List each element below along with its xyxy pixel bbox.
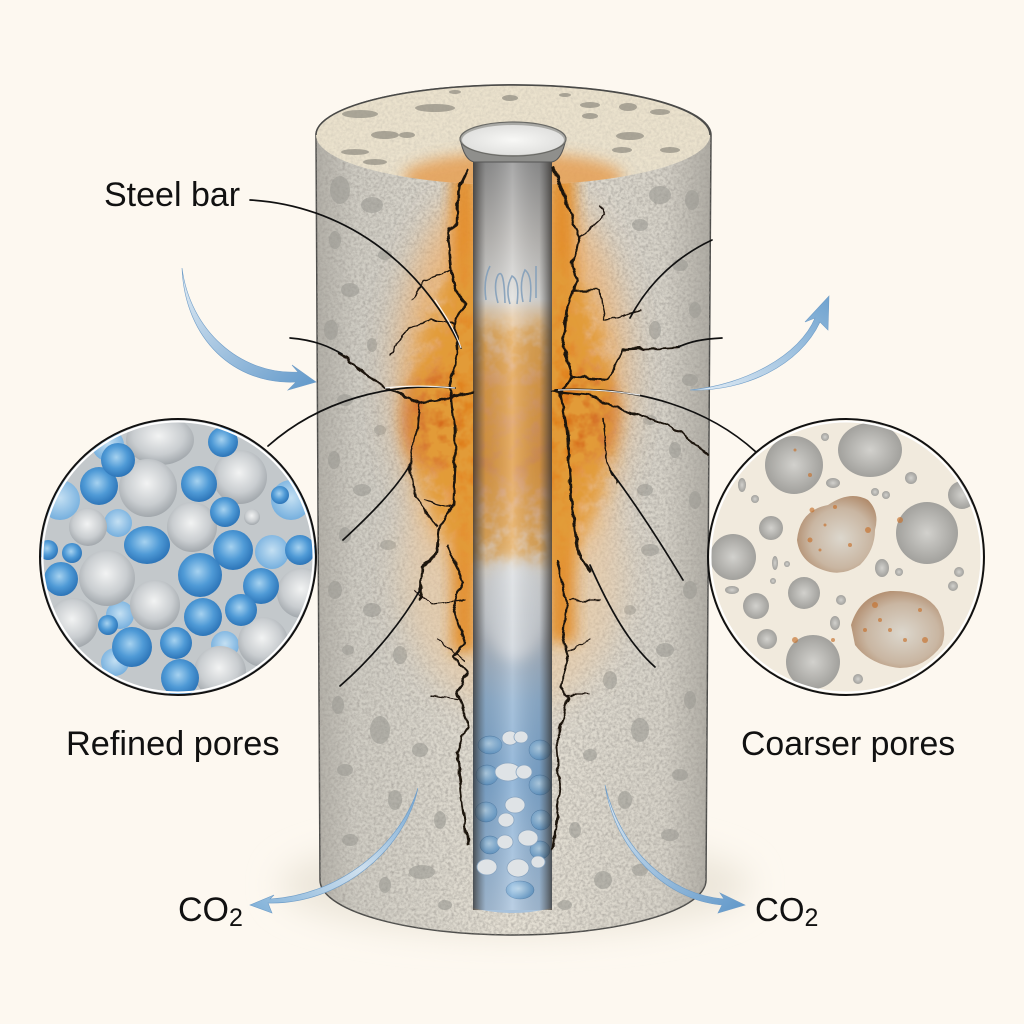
concrete pores [324, 176, 701, 910]
mottled rust texture [412, 240, 612, 580]
aggregate at base of bar [477, 731, 545, 877]
label: CO2 right: 2 [804, 904, 818, 932]
label: CO2 right: CO [755, 891, 804, 928]
label: coarser pores: Coarser pores [741, 725, 955, 763]
white-grey patch in the rust [483, 560, 547, 660]
lower blue pebbles [475, 736, 551, 899]
right arrow [690, 296, 829, 390]
bottom left arrow [250, 788, 418, 913]
inset: refined pores [38, 415, 327, 698]
rust texture on bar [473, 325, 552, 560]
label: steel bar: Steel bar [104, 176, 240, 214]
concrete cylinder [316, 85, 712, 935]
ground shadow [280, 835, 750, 935]
leader lines [250, 200, 756, 686]
bar head [460, 138, 566, 162]
bottom right arrow [605, 785, 745, 913]
inset: coarser pores [708, 419, 984, 695]
left arrow [182, 268, 316, 390]
label: CO2 left: 2 [229, 904, 243, 932]
label: CO2 left: CO [178, 891, 229, 929]
white leader highlights [385, 300, 640, 395]
cylinder top face [315, 84, 710, 184]
label: refined pores: Refined pores [66, 725, 280, 763]
corrosion glow [397, 172, 627, 710]
cracks [340, 167, 708, 850]
corroded patch [485, 266, 536, 304]
steel bar [460, 122, 566, 913]
